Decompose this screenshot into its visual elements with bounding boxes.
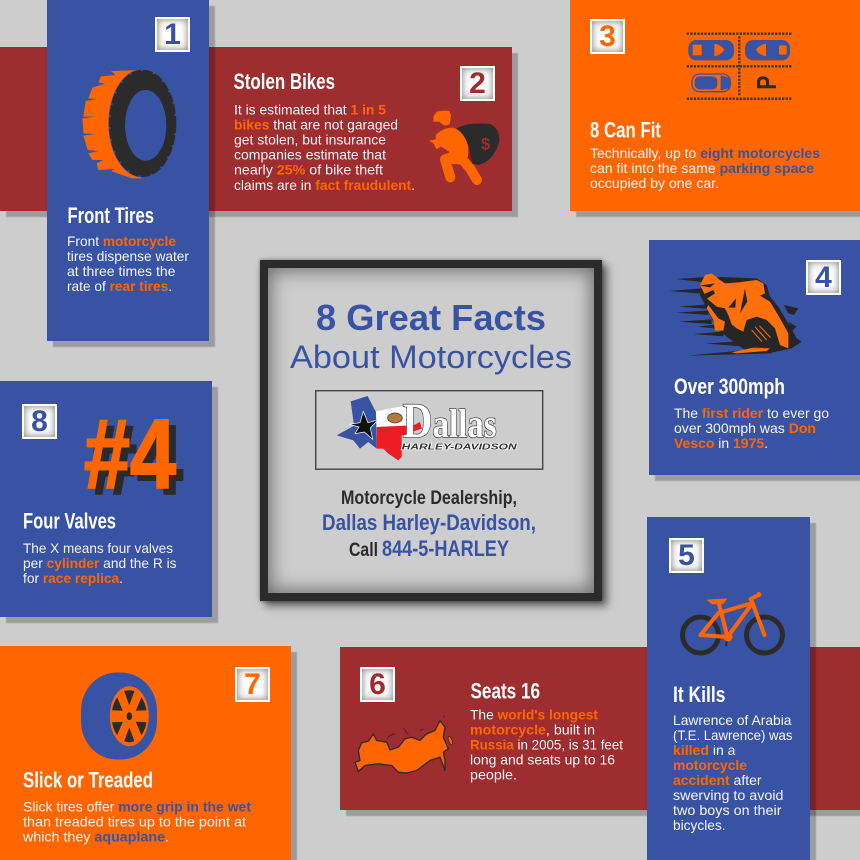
text: it kills body: motorcycle xyxy=(672,757,747,773)
text: it kills body: accident after xyxy=(672,772,761,788)
icon: parking spaces: P xyxy=(751,76,782,90)
text: stolen bikes body: get stolen, but insurance xyxy=(234,132,386,148)
text: seats 16 body: The world's longest xyxy=(470,706,598,722)
badge 6 xyxy=(360,667,395,702)
text: dealership call to action xyxy=(322,488,536,561)
heading: it kills: It Kills xyxy=(672,682,725,707)
badge 3 xyxy=(590,19,625,54)
badge 5 xyxy=(669,538,704,573)
badge 3: 3 xyxy=(599,20,616,53)
text: 8 can fit body: can fit into the same parking space xyxy=(590,160,814,176)
heading: 8 can fit: 8 Can Fit xyxy=(590,118,662,143)
text: it kills body: Lawrence of Arabia xyxy=(672,712,791,728)
text: stolen bikes body: claims are in fact fraudulent. xyxy=(234,177,415,193)
text: 8 can fit body: occupied by one car. xyxy=(590,175,719,191)
text: it kills body: (T.E. Lawrence) was xyxy=(672,727,792,743)
text: slick or treaded body xyxy=(22,798,251,844)
text: it kills body: bicycles. xyxy=(672,817,725,833)
heading: front tires: Front Tires xyxy=(68,203,154,228)
heading: four valves: Four Valves xyxy=(23,509,116,534)
text: over 300mph body: Vesco in 1975. xyxy=(674,435,768,451)
text: front tires body xyxy=(67,233,189,294)
text: front tires body: rate of rear tires. xyxy=(67,278,172,294)
icon: parking spaces xyxy=(687,34,792,99)
text: four valves body: The X means four valves xyxy=(23,540,173,556)
text: 8 can fit body xyxy=(590,145,820,191)
title: 8 Great Facts xyxy=(316,297,546,338)
badge 1: 1 xyxy=(164,18,181,51)
logo: Dallas Harley-Davidson: HARLEY-DAVIDSON xyxy=(402,441,518,451)
badge 4 xyxy=(806,260,841,295)
icon: big number 4: #4 xyxy=(84,399,176,509)
text: it kills body: swerving to avoid xyxy=(672,787,783,803)
panel 7: slick or treaded xyxy=(0,646,290,860)
text: slick or treaded body: than treaded tires up to the point at xyxy=(23,813,246,829)
text: it kills body: two boys on their xyxy=(672,802,781,818)
text: stolen bikes body: It is estimated that 1 in 5 xyxy=(234,102,386,118)
text: over 300mph body: The first rider to ever go xyxy=(674,405,829,421)
text: four valves body: for race replica. xyxy=(23,570,123,586)
heading: slick or treaded: Slick or Treaded xyxy=(23,767,153,792)
text: over 300mph body xyxy=(674,405,829,451)
panel 6: seats 16 xyxy=(340,646,860,810)
panel 3: 8 can fit xyxy=(570,0,860,211)
text: slick or treaded body: Slick tires offer more grip in the wet xyxy=(23,798,251,814)
badge 8 xyxy=(22,404,57,439)
panel 8: four valves xyxy=(0,381,212,617)
text: seats 16 body: Russia in 2005, is 31 feet xyxy=(470,736,623,752)
text: stolen bikes body: bikes that are not garaged xyxy=(234,116,398,132)
panel: central title frame xyxy=(260,260,602,601)
text: stolen bikes body: nearly 25% of bike theft xyxy=(234,162,383,178)
icon: thief with money bag: $ xyxy=(481,134,491,153)
badge 5: 5 xyxy=(678,539,695,572)
icon: big number 4: #4 xyxy=(91,405,183,515)
heading: seats 16: Seats 16 xyxy=(470,678,540,703)
text: seats 16 body: people. xyxy=(470,766,517,782)
text: over 300mph body: over 300mph was Don xyxy=(674,420,816,436)
text: stolen bikes body: companies estimate that xyxy=(234,147,386,163)
badge 7 xyxy=(235,667,270,702)
title: About Motorcycles xyxy=(290,339,572,375)
panel 4: over 300mph xyxy=(649,240,860,475)
icon: map of Russia xyxy=(355,715,453,773)
text: dealership call to action: 844-5-HARLEY xyxy=(382,536,509,561)
badge 6: 6 xyxy=(369,668,386,701)
text: front tires body: Front motorcycle xyxy=(67,233,176,249)
icon: tire xyxy=(82,69,177,178)
badge 8: 8 xyxy=(31,405,48,438)
panel 1: front tires xyxy=(47,0,208,341)
icon: racing motorcycle rider xyxy=(669,273,802,356)
panel 2: stolen bikes xyxy=(0,47,512,211)
text: stolen bikes body xyxy=(234,102,415,193)
badge 7: 7 xyxy=(244,668,261,701)
panel 5: it kills xyxy=(646,517,810,860)
logo: Dallas Harley-Davidson: Dallas xyxy=(403,392,497,448)
text: four valves body: per cylinder and the R is xyxy=(23,555,176,571)
icon: wheel xyxy=(81,672,157,759)
icon: thief with money bag xyxy=(429,111,499,180)
logo: Dallas Harley-Davidson xyxy=(316,391,543,469)
text: it kills body: killed in a xyxy=(672,742,735,758)
text: dealership call to action: Call xyxy=(349,540,378,561)
badge 2 xyxy=(460,66,495,101)
text: it kills body xyxy=(672,712,792,833)
text: dealership call to action: Motorcycle Dealership, xyxy=(341,488,517,509)
text: slick or treaded body: which they aquaplane. xyxy=(22,828,169,844)
badge 1 xyxy=(155,17,190,52)
text: seats 16 body xyxy=(470,706,623,782)
badge 4: 4 xyxy=(815,261,832,294)
heading: over 300mph: Over 300mph xyxy=(674,374,785,399)
heading: stolen bikes: Stolen Bikes xyxy=(234,69,335,94)
text: dealership call to action: Dallas Harley-Davidson, xyxy=(322,510,536,535)
text: 8 can fit body: Technically, up to eight motorcycles xyxy=(590,145,820,161)
text: front tires body: at three times the xyxy=(67,263,176,279)
icon: bicycle xyxy=(682,592,782,653)
title xyxy=(290,297,572,375)
text: four valves body xyxy=(23,540,176,586)
text: seats 16 body: long and seats up to 16 xyxy=(470,751,615,767)
badge 2: 2 xyxy=(469,67,486,100)
text: front tires body: tires dispense water xyxy=(67,248,189,264)
text: seats 16 body: motorcycle, built in xyxy=(470,721,595,737)
